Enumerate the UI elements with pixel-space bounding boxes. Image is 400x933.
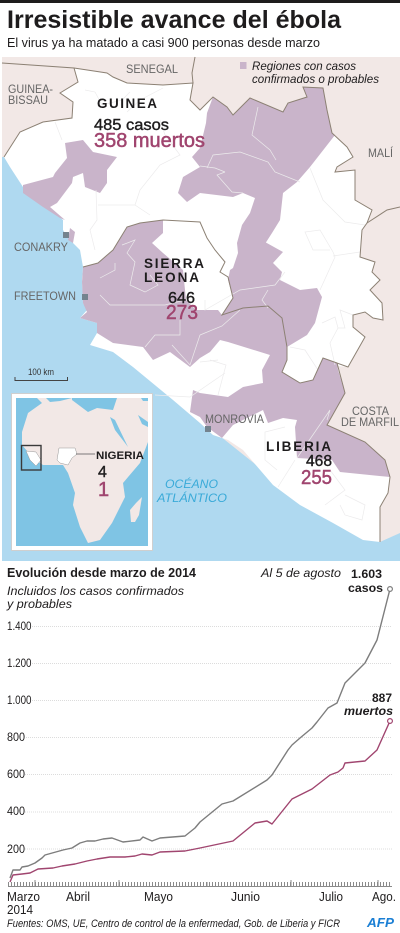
Red Sea [110,417,128,447]
month labels: Julio [319,890,343,904]
Alboran sea [46,398,72,402]
Monrovia marker and label: MONROVIA [205,414,264,426]
y axis labels: 1.200 [7,658,32,670]
Guinea, Sierra Leone and Liberia land [4,68,390,542]
Sierra Leone figures: 646 [168,290,195,307]
Nigeria [57,448,77,465]
Mediterranean sea [72,398,117,412]
affected regions: eastern Guinea [178,87,335,247]
internal region lines [55,88,365,520]
Africa landmass [22,398,148,543]
end marker: cases [388,587,392,591]
Freetown marker and label: FREETOWN [14,291,76,303]
chart subheading [6,584,184,611]
Liberia figures: 468 [306,453,332,470]
month labels: Mayo [144,890,173,904]
Guinea-Bissau label: GUINEA- [8,84,53,96]
y axis labels: 200 [7,844,25,856]
date note: Al 5 de agosto [260,566,341,580]
chart subheading: Incluidos los casos confirmados [7,584,184,598]
Guinea figures: 485 casos [94,117,169,134]
legend [240,59,379,86]
Mali label: MALÍ [368,147,394,160]
West Africa locator box [22,446,41,470]
top black bar [0,0,400,3]
grid lines [25,626,392,849]
Liberia figures: 255 [301,467,332,489]
Nigeria figures: 1 [98,479,109,501]
Costa de Marfil label [341,406,400,429]
Conakry marker and label: CONAKRY [14,242,68,254]
AFP logo: AFP [366,915,394,930]
month labels: Junio [231,890,260,904]
ocean label: OCÉANO [165,476,218,491]
Guinea-Bissau label: BISSAU [8,95,48,107]
end marker: deaths [388,719,392,723]
y axis labels: 400 [7,806,25,818]
panel: line chart [6,566,396,917]
ocean [2,57,400,561]
Nigeria figures [96,450,144,501]
neighbouring countries land [2,57,400,542]
affected regions: western Guinea [23,140,117,220]
month labels: Marzo [7,890,40,904]
affected regions: Conakry [68,228,75,243]
legend: confirmados o probables [252,72,379,86]
legend: Regiones con casos [252,59,356,73]
cases callout [348,567,383,595]
Costa de Marfil label: COSTA [352,406,389,418]
Nigeria figures: NIGERIA [96,450,144,462]
inset: Africa locator map [12,394,152,550]
Sierra Leone figures [144,256,204,324]
deaths callout [344,691,393,718]
deaths callout: 887 [372,691,392,705]
affected regions: Sierra Leone, southeast Guinea and Liberia [80,220,390,477]
chart subheading: y probables [6,597,72,611]
chart heading: Evolución desde marzo de 2014 [7,566,196,580]
deaths callout: muertos [344,704,393,718]
Sierra Leone figures: 273 [166,302,198,324]
y axis labels: 1.400 [7,621,32,633]
cases callout: casos [348,581,383,595]
month labels: 2014 [7,903,33,917]
Persian Gulf [138,415,148,427]
Guinea figures [94,96,205,152]
Monrovia marker and label [205,414,264,432]
Senegal label: SENEGAL [126,62,178,76]
y axis labels: 600 [7,769,25,781]
Conakry marker and label [14,232,69,254]
scale bar [15,367,68,380]
panel: map [2,57,400,561]
Sierra Leone figures: LEONA [144,270,199,285]
scale bar: 100 km [28,367,54,377]
x axis with ticks [8,880,392,886]
y axis labels: 800 [7,732,25,744]
Guinea figures: 358 muertos [94,130,205,152]
subtitle: El virus ya ha matado a casi 900 personas desde marzo [7,35,320,50]
title: Irresistible avance del ébola [7,6,342,34]
Nigeria figures: 4 [98,464,107,481]
Liberia figures: LIBERIA [266,439,331,454]
Sierra Leone figures: SIERRA [144,256,204,271]
ocean label [156,476,227,505]
ocean label: ATLÁNTICO [156,490,227,505]
borders [2,57,400,542]
y axis labels: 1.000 [7,695,32,707]
sources: Fuentes: OMS, UE, Centro de control de la enfermedad, Gob. de Liberia y FICR [7,918,340,930]
Liberia figures [266,439,332,489]
Madagascar [130,497,142,522]
line: deaths [10,721,390,882]
Black Sea corner [141,398,148,401]
cases callout: 1.603 [351,567,382,581]
month labels [7,890,396,917]
month labels: Abril [66,890,90,904]
line: cases [10,589,390,878]
leader line [76,453,95,455]
month labels: Ago. [372,890,396,904]
y axis labels [7,621,32,856]
Guinea figures: GUINEA [97,96,157,111]
